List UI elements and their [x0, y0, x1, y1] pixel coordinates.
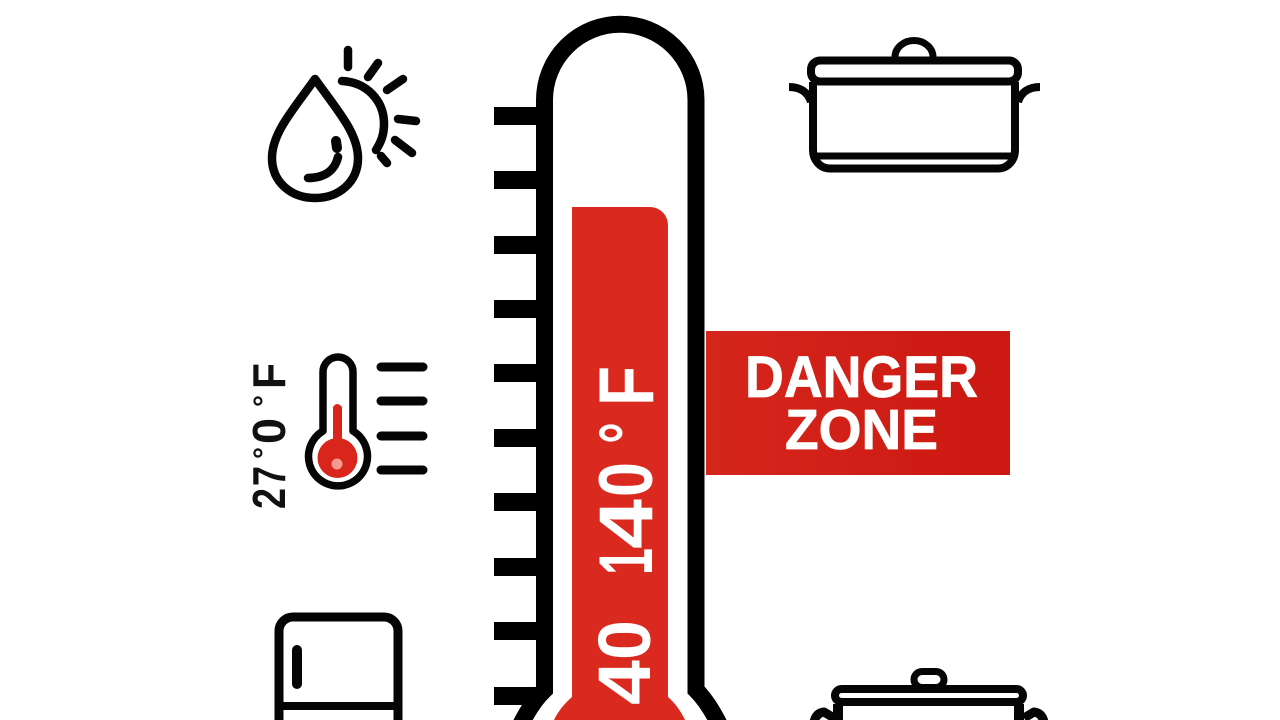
value: 40: 4 [583, 660, 666, 705]
icon: water drop and sun [272, 50, 416, 198]
label: small thermometer temperature [243, 363, 295, 509]
icon: refrigerator [279, 617, 398, 720]
value: 40: 0 [583, 620, 666, 660]
value: 140 degrees F [582, 366, 670, 575]
label: small thermometer temperature: ° [248, 395, 281, 407]
red mercury column [553, 207, 686, 720]
icon: cooking pot, bottom [814, 672, 1044, 720]
icon: small thermometer with level lines [308, 357, 423, 486]
label: small thermometer temperature: 7 [243, 466, 295, 486]
value: 140 degrees F: 4 [584, 499, 669, 549]
value: 140 degrees F: F [582, 366, 670, 406]
value: 40 [583, 620, 666, 705]
label: small thermometer temperature: 0 [243, 418, 295, 444]
value: 140 degrees F: 0 [584, 462, 669, 497]
label: small thermometer temperature: F [243, 363, 295, 389]
callout: danger zone: ZONE [785, 398, 938, 462]
thermometer [494, 24, 722, 720]
label: small thermometer temperature: ° [248, 447, 281, 459]
value: 140 degrees F: 1 [584, 548, 669, 575]
icon: cooking pot, top [789, 40, 1040, 168]
label: small thermometer temperature: 2 [243, 488, 295, 509]
white inner flare [532, 694, 708, 720]
callout: danger zone: DANGER [745, 345, 978, 410]
thermometer scale ticks [494, 116, 537, 696]
value: 140 degrees F: ° [584, 422, 669, 444]
callout: danger zone [706, 331, 1010, 475]
thermometer outline [518, 24, 722, 720]
